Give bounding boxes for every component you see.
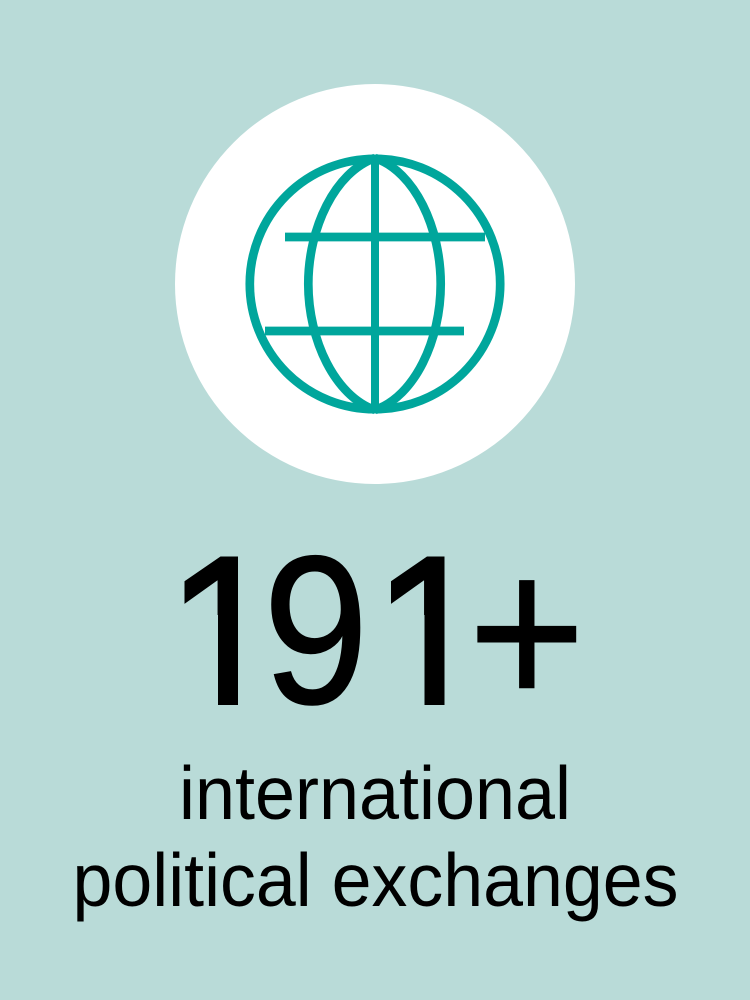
infographic panel	[77, 84, 676, 922]
caption	[72, 751, 678, 922]
big number: 1	[372, 513, 491, 751]
white circle badge	[175, 84, 575, 484]
big number: +	[468, 509, 586, 754]
caption: political exchanges	[72, 838, 678, 922]
big number: 9	[263, 512, 369, 748]
caption: international	[179, 751, 571, 835]
big number: 1	[166, 513, 284, 751]
icon: globe	[250, 158, 500, 410]
big number	[184, 554, 576, 706]
